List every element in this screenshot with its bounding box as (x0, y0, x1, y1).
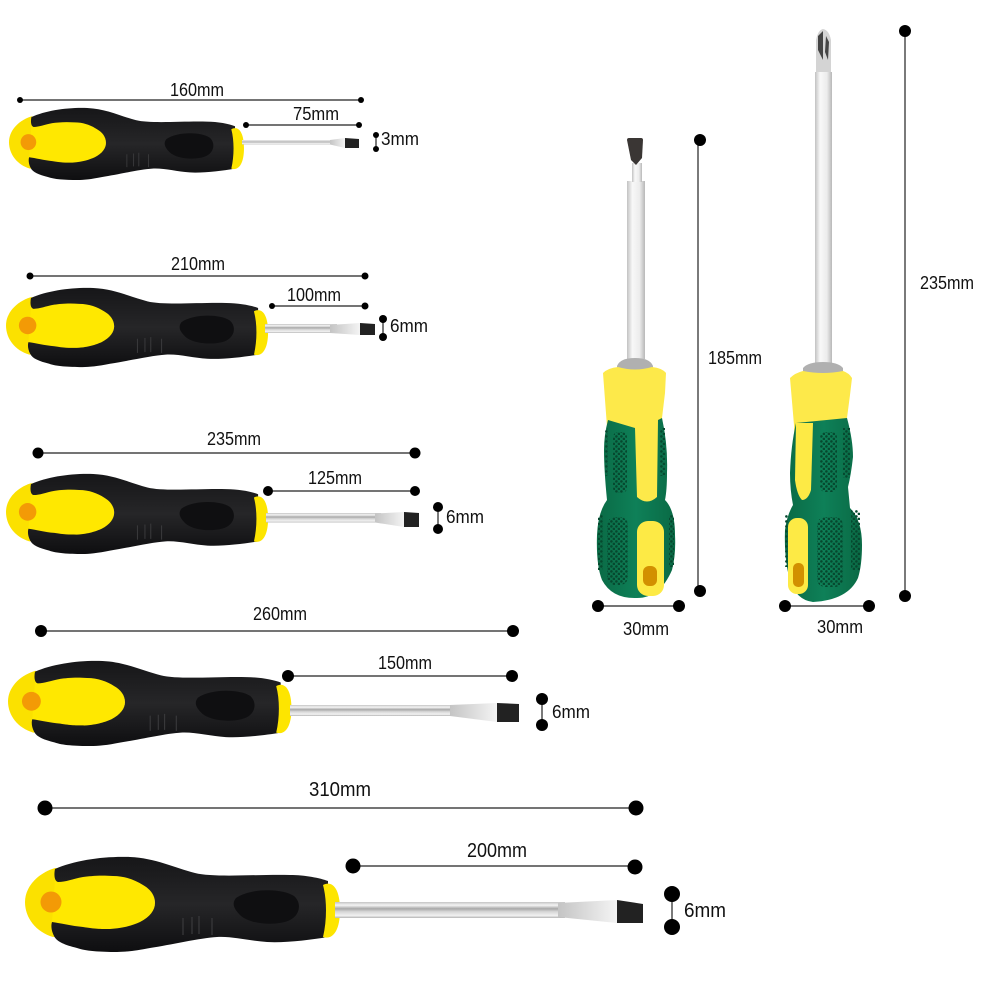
dimension: 200mm: 200mm (467, 840, 527, 862)
dimension: 235mm (32, 429, 420, 458)
dimension: 30mm width: 30mm (817, 617, 863, 637)
dimension: 6mm (433, 502, 484, 534)
dimension: 6mm: 6mm (390, 316, 428, 336)
dimension: 6mm: 6mm (684, 900, 726, 922)
dimension: 75mm (243, 104, 362, 128)
dimension: 30mm width (779, 600, 875, 637)
dimension: 160mm: 160mm (170, 80, 224, 100)
dimension: 235mm: 235mm (207, 429, 261, 449)
dimension: 150mm (282, 653, 518, 682)
dimension: 3mm: 3mm (381, 129, 419, 149)
dimension: 310mm (38, 779, 644, 816)
dimension: 100mm: 100mm (287, 285, 341, 305)
dimension: 185mm height: 185mm (708, 348, 762, 368)
screwdriver: 160mm slotted (9, 108, 359, 180)
dimension: 185mm height (694, 134, 762, 597)
screwdriver: 210mm slotted (6, 288, 375, 367)
screwdriver: green 235mm phillips (785, 29, 862, 602)
dimension: 6mm (379, 315, 428, 341)
dimension: 160mm (17, 80, 364, 103)
dimension: 260mm: 260mm (253, 604, 307, 624)
dimension: 3mm (373, 129, 419, 152)
screwdriver: green 185mm slotted (597, 138, 675, 598)
dimension: 100mm (269, 285, 368, 310)
dimension: 210mm (26, 254, 368, 280)
screwdriver: 310mm slotted (25, 857, 643, 952)
dimension: 75mm: 75mm (293, 104, 339, 124)
dimension: 6mm: 6mm (552, 702, 590, 722)
screwdriver: 235mm slotted (6, 474, 419, 554)
dimension: 200mm (346, 840, 642, 874)
dimension: 30mm width (592, 600, 685, 639)
dimension: 235mm height: 235mm (920, 273, 974, 293)
dimension: 235mm height (899, 25, 974, 602)
dimension: 260mm (35, 604, 519, 637)
dimension: 210mm: 210mm (171, 254, 225, 274)
dimension: 30mm width: 30mm (623, 619, 669, 639)
screwdriver: 260mm slotted (8, 661, 519, 746)
dimension: 6mm (536, 693, 590, 731)
dimension: 6mm: 6mm (446, 507, 484, 527)
dimension: 310mm: 310mm (309, 779, 371, 801)
dimension: 125mm: 125mm (308, 468, 362, 488)
dimension: 6mm (664, 886, 726, 935)
dimension: 125mm (263, 468, 420, 496)
dimension: 150mm: 150mm (378, 653, 432, 673)
